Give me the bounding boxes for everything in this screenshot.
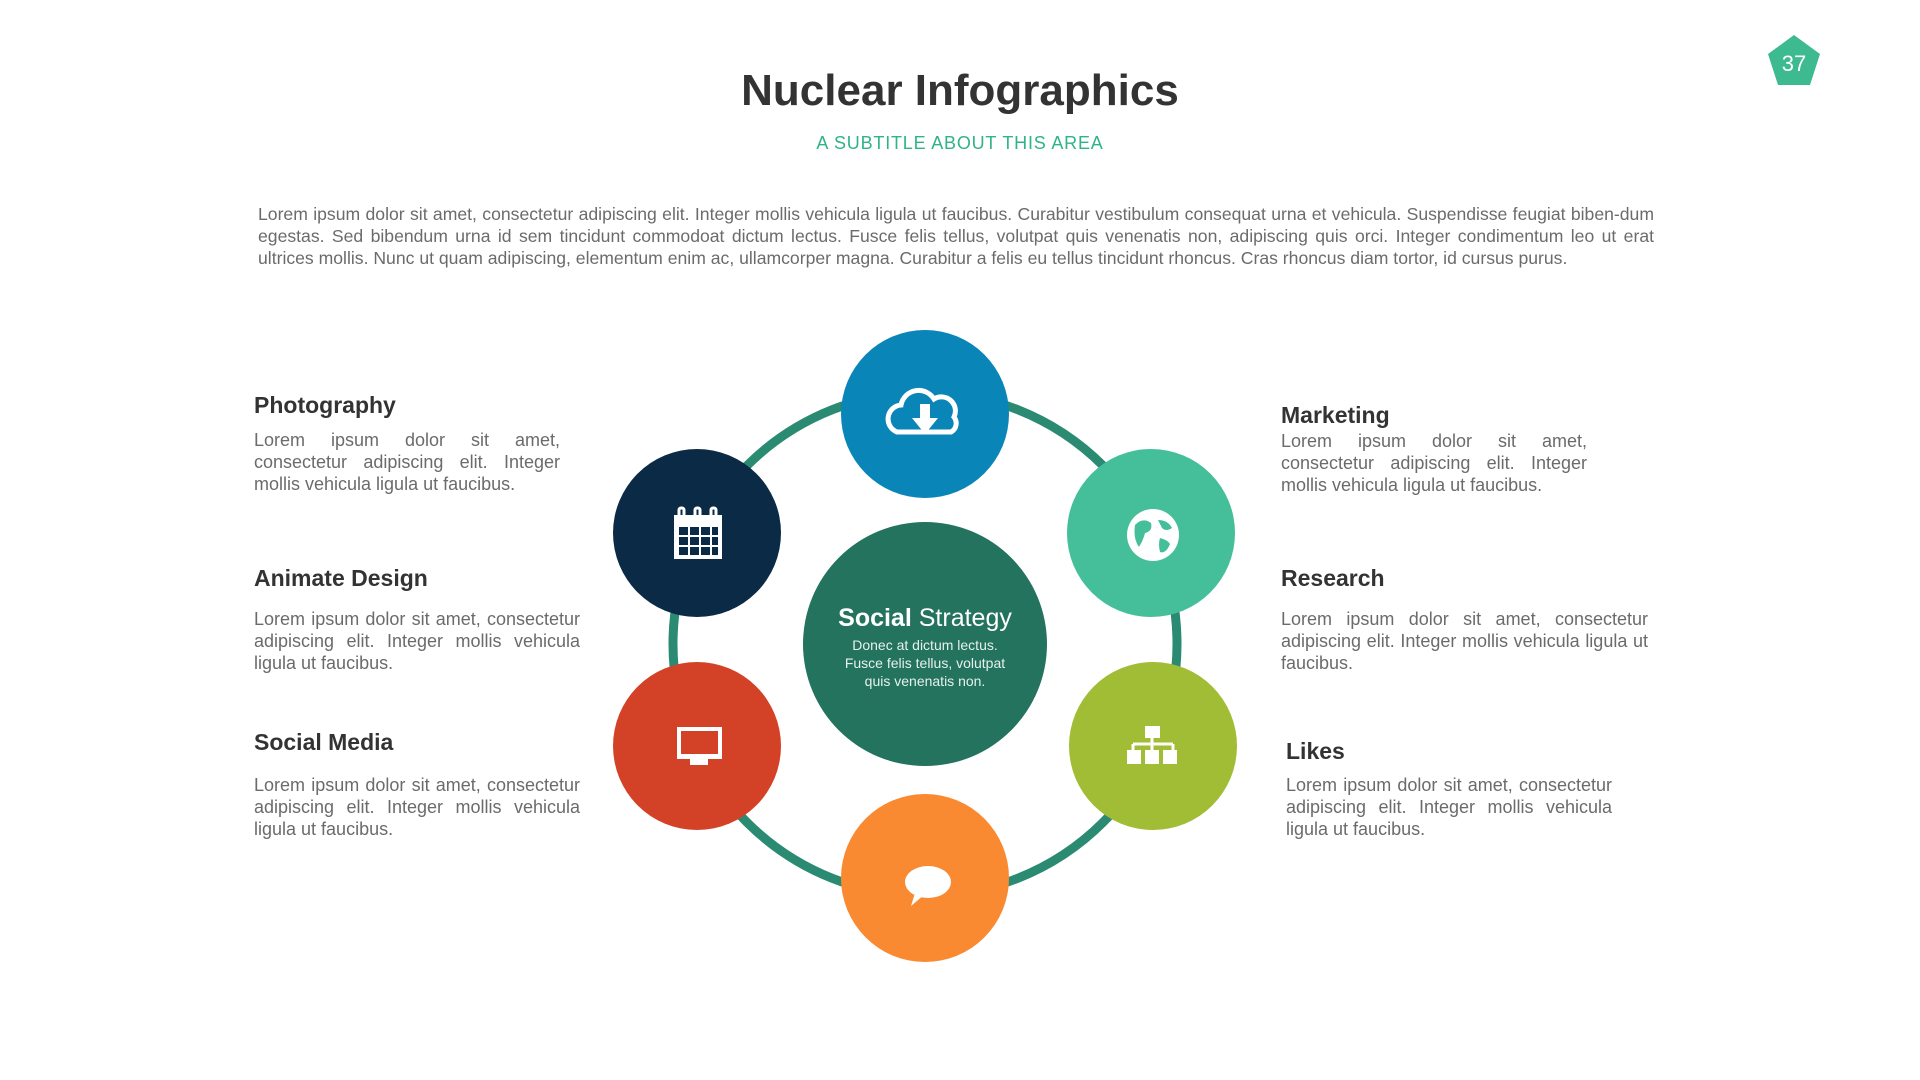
subtitle: A SUBTITLE ABOUT THIS AREA — [816, 133, 1104, 153]
text: Marketing: Lorem ipsum dolor sit amet, consectetur adipiscing elit. Integer mollis vehicula ligula ut faucibus. — [1281, 431, 1587, 495]
text: Photography: Photography — [254, 392, 396, 418]
text: Likes: Lorem ipsum dolor sit amet, consectetur adipiscing elit. Integer mollis vehicula ligula ut faucibus. — [1286, 775, 1612, 839]
icon: speech bubble — [841, 794, 1009, 962]
text: Social Media — [254, 729, 580, 839]
text: Animate Design: Lorem ipsum dolor sit amet, consectetur adipiscing elit. Integer mollis vehicula ligula ut faucibus. — [254, 609, 580, 673]
text: Research: Lorem ipsum dolor sit amet, consectetur adipiscing elit. Integer mollis vehicula ligula ut faucibus. — [1281, 609, 1648, 673]
icon: calendar — [613, 449, 781, 617]
text: Social Media: Social Media — [254, 729, 393, 755]
page number badge: 37 — [1782, 51, 1806, 76]
center circle: Fusce felis tellus, volutpat — [845, 655, 1005, 671]
text: Likes — [1286, 738, 1612, 839]
text: Social Media: Lorem ipsum dolor sit amet, consectetur adipiscing elit. Integer mollis vehicula ligula ut faucibus. — [254, 775, 580, 839]
text: Research: Research — [1281, 565, 1385, 591]
center circle — [803, 522, 1047, 766]
text: Likes: Likes — [1286, 738, 1345, 764]
title: Nuclear Infographics — [741, 66, 1179, 115]
icon: globe — [1067, 449, 1235, 617]
text: Research — [1281, 565, 1648, 673]
icon: monitor — [613, 662, 781, 830]
icon: cloud download — [841, 330, 1009, 498]
center circle: Donec at dictum lectus. — [852, 637, 998, 653]
text: Marketing — [1281, 402, 1587, 495]
center circle: Social Strategy — [838, 604, 1012, 632]
text: Photography — [254, 392, 560, 494]
text: Animate Design: Animate Design — [254, 565, 428, 591]
text: Photography: Lorem ipsum dolor sit amet, consectetur adipiscing elit. Integer mollis vehicula ligula ut faucibus. — [254, 430, 560, 494]
intro paragraph: Lorem ipsum dolor sit amet, consectetur adipiscing elit. Integer mollis vehicula ligula ut faucibus. Curabitur vestibulum consequat urna et vehicula. Suspendisse feugiat biben-dum egestas. Sed bibendum urna id sem tincidunt commodoat dictum lectus. Fusce felis tellus, volutpat quis venenatis non, adipiscing quis orci. Integer condimentum leo ut erat ultrices mollis. Nunc ut quam adipiscing, elementum enim ac, ullamcorper magna. Curabitur a felis eu tellus tincidunt rhoncus. Cras rhoncus diam tortor, id cursus purus. — [258, 204, 1654, 268]
text: Marketing: Marketing — [1281, 402, 1390, 428]
page number badge — [1768, 35, 1820, 85]
icon: hierarchy — [1069, 662, 1237, 830]
text: Animate Design — [254, 565, 580, 673]
diagram — [613, 330, 1237, 962]
center circle: quis venenatis non. — [865, 673, 985, 689]
